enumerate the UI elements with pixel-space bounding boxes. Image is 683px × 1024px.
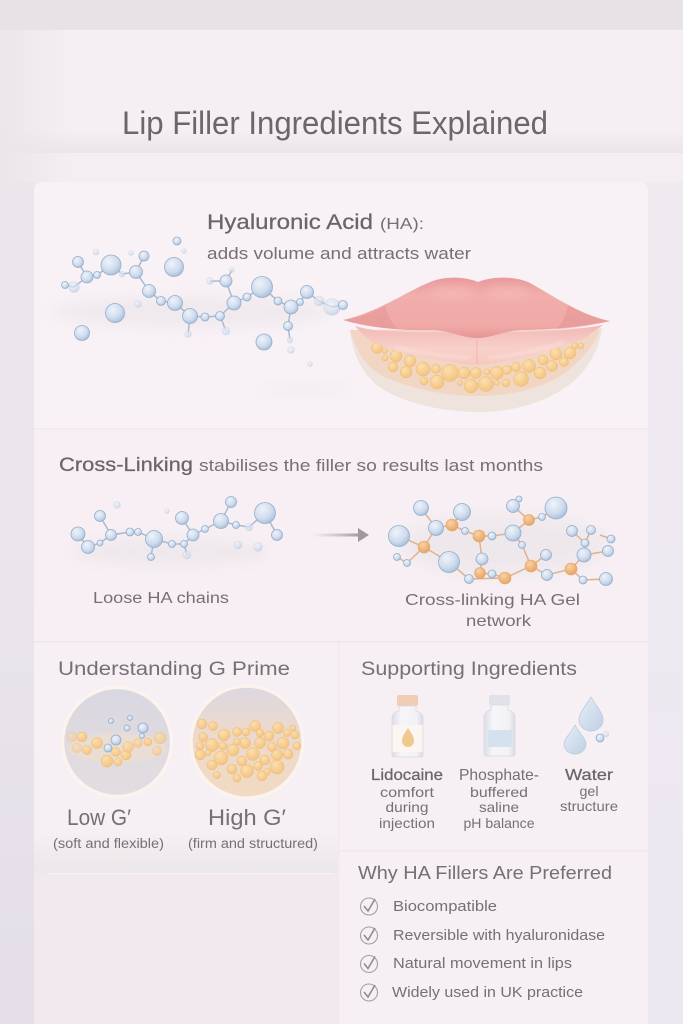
note: high G prime: (firm and structured) (188, 836, 318, 851)
note: low G prime: (soft and flexible) (53, 836, 164, 851)
heading: hyaluronic acid: (HA): (380, 216, 424, 233)
text: phosphate-buffered saline: pH balance (464, 815, 535, 831)
illustration: high G prime circle (191, 686, 303, 798)
text: lidocaine (371, 767, 443, 831)
list item: widely used: Widely used in UK practice (392, 984, 583, 1001)
icon: lidocaine vial (392, 695, 423, 757)
label: cross-linking HA gel network: Cross-linking HA Gel (405, 592, 580, 609)
main card (34, 182, 648, 1024)
text: phosphate-buffered saline: buffered (470, 784, 528, 800)
panel: understanding G prime (53, 659, 318, 851)
panel: hyaluronic acid (50, 211, 610, 412)
list item: natural movement: Natural movement in lips (393, 955, 572, 972)
text: phosphate-buffered saline: Phosphate- (459, 767, 539, 784)
icon: saline vial (484, 695, 515, 756)
text: water: structure (560, 798, 618, 814)
text: lidocaine: comfort (380, 784, 434, 800)
text: phosphate-buffered saline: saline (479, 799, 519, 815)
illustration: HA molecule chain (50, 237, 350, 395)
label: loose HA chains: Loose HA chains (93, 590, 229, 607)
text: water: Water (565, 767, 614, 784)
text: water (560, 767, 618, 814)
text: phosphate-buffered saline (459, 767, 539, 831)
label: cross-linking HA gel network (405, 592, 580, 630)
illustration: lips with filler (343, 278, 610, 412)
text: lidocaine: injection (379, 815, 435, 831)
icon: water drops (564, 697, 609, 754)
label: low G prime: Low G′ (67, 805, 131, 830)
heading: why HA fillers: Why HA Fillers Are Preferred (358, 863, 612, 883)
description: hyaluronic acid: adds volume and attracts water (207, 244, 471, 263)
illustration: low G prime circle (62, 688, 172, 796)
heading: cross-linking: Cross-Linking (59, 455, 193, 476)
text: lidocaine: during (386, 799, 428, 815)
illustration: cross-linked HA gel network (388, 496, 615, 586)
arrow (312, 528, 369, 542)
heading: hyaluronic acid: Hyaluronic Acid (207, 211, 373, 234)
panel: supporting ingredients (361, 659, 618, 831)
panel: cross-linking (59, 455, 615, 630)
heading: understanding G prime: Understanding G Prime (58, 659, 290, 680)
label: cross-linking HA gel network: network (466, 613, 532, 630)
label: high G prime: High G′ (208, 805, 286, 830)
heading: cross-linking (59, 455, 543, 476)
heading: supporting ingredients: Supporting Ingredients (361, 659, 577, 680)
heading: cross-linking: stabilises the filler so results last months (199, 456, 543, 475)
illustration: loose HA chains (70, 496, 282, 566)
heading: hyaluronic acid (207, 211, 424, 234)
text: lidocaine: Lidocaine (371, 767, 443, 784)
panel: why HA fillers are preferred (358, 863, 612, 1001)
text: water: gel (580, 783, 598, 799)
list item: biocompatible: Biocompatible (393, 898, 497, 915)
title: Lip Filler Ingredients Explained (122, 105, 548, 141)
list item: reversible: Reversible with hyaluronidase (393, 927, 605, 944)
list item: biocompatible (360, 898, 497, 915)
